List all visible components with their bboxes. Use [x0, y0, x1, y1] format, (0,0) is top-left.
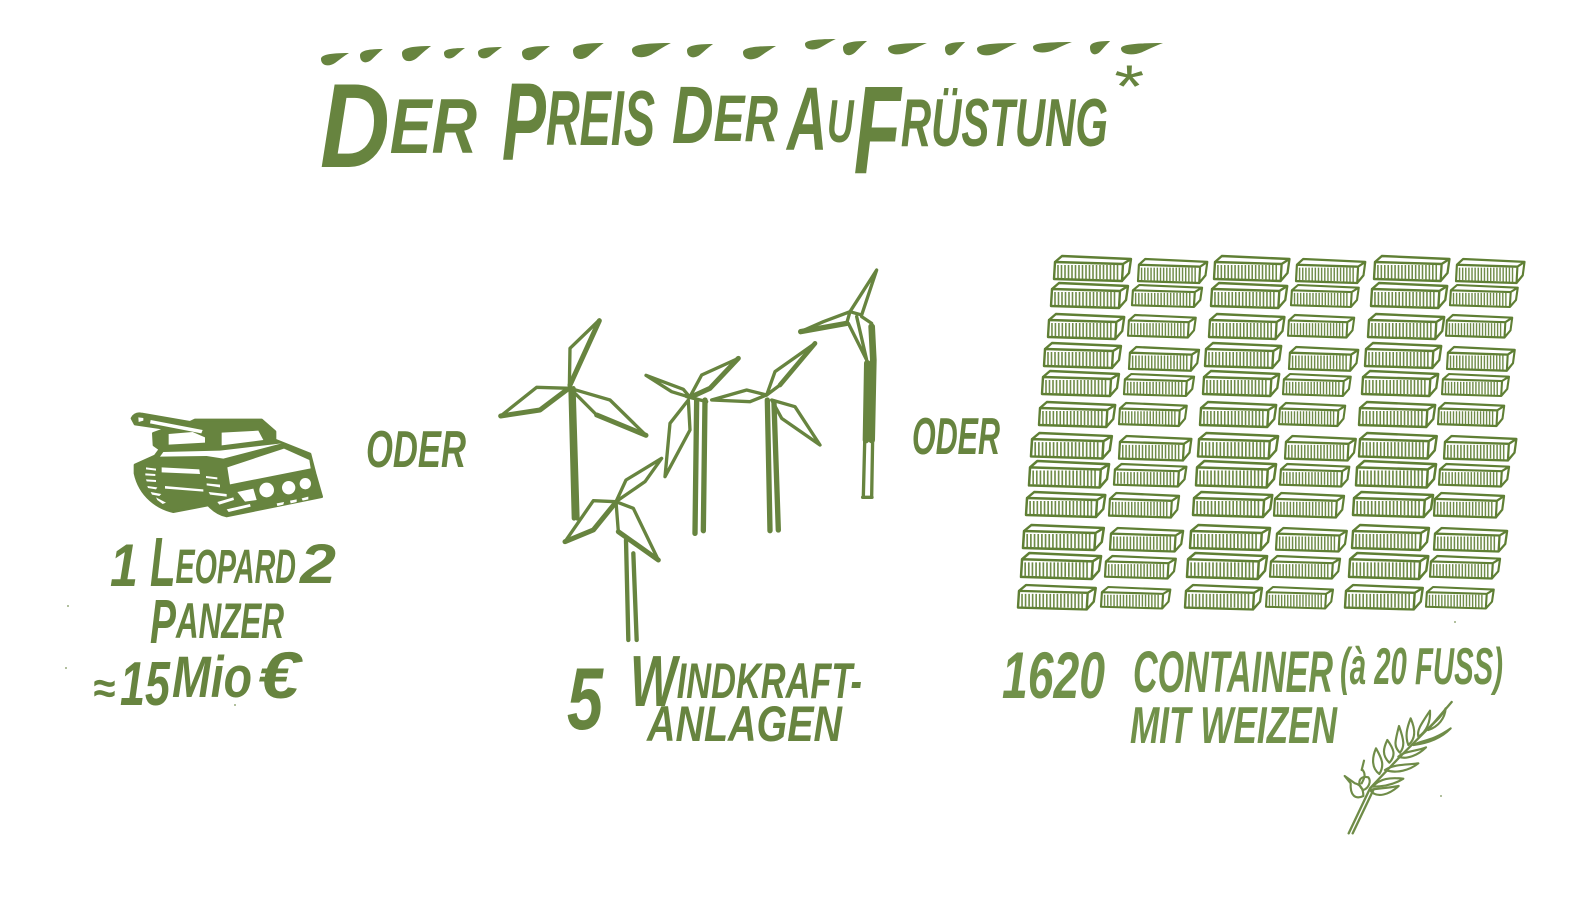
label: tank price: Mio: [172, 645, 252, 710]
turbine 3: [712, 343, 820, 531]
label: tank name: ANZER: [175, 593, 284, 649]
block 4: [1018, 525, 1507, 610]
turbine 4: [801, 270, 877, 497]
icon: wheat: [1345, 702, 1452, 833]
label: tank price: [93, 638, 304, 719]
label: containers: MIT WEIZEN: [1130, 697, 1338, 755]
label: tank name: L: [150, 523, 176, 601]
title: RÜSTUNG: [901, 85, 1108, 161]
label: containers: 1620: [1002, 638, 1105, 712]
label: containers: [1002, 638, 1503, 755]
block 2: [1039, 343, 1515, 427]
label: containers: CONTAINER: [1133, 640, 1333, 705]
decorative specks: [65, 605, 1456, 797]
label: tank name: 1: [110, 532, 138, 599]
title decoration: brush dashes: [321, 39, 1163, 65]
label: tank price: ≈: [93, 664, 115, 713]
label: tank price: 15: [120, 650, 171, 719]
icon: tank: [132, 414, 322, 516]
text: oder 2: ODER: [912, 408, 1000, 466]
label: wind turbines: 5: [567, 649, 604, 748]
label: wind turbines: W: [630, 642, 681, 722]
turbine 5: [565, 458, 662, 640]
title: D: [672, 70, 714, 161]
label: tank name: P: [150, 588, 176, 657]
title: REIS: [546, 74, 655, 162]
label: wind turbines: INDKRAFT-: [677, 653, 862, 709]
turbine 2: [646, 358, 738, 533]
label: tank name: 2: [299, 532, 336, 595]
title: A: [786, 70, 827, 170]
label: tank name: [110, 523, 336, 657]
label: tank price: €: [258, 638, 304, 712]
title: ER: [714, 81, 778, 155]
title: *: [1111, 53, 1143, 120]
icon: wind turbines: [501, 270, 877, 640]
title: P: [502, 61, 546, 184]
label: tank name: EOPARD: [176, 541, 296, 594]
block 1: [1048, 256, 1525, 339]
title: D: [320, 59, 390, 193]
turbine 1: [501, 320, 646, 518]
containers grid: [1018, 256, 1525, 610]
block 3: [1026, 433, 1516, 518]
title: [320, 53, 1143, 200]
title: U: [827, 88, 855, 155]
label: wind turbines: ANLAGEN: [645, 696, 843, 752]
title: F: [854, 61, 903, 200]
text: oder 1: ODER: [366, 421, 466, 479]
label: wind turbines: [567, 642, 862, 752]
title: ER: [390, 82, 477, 170]
